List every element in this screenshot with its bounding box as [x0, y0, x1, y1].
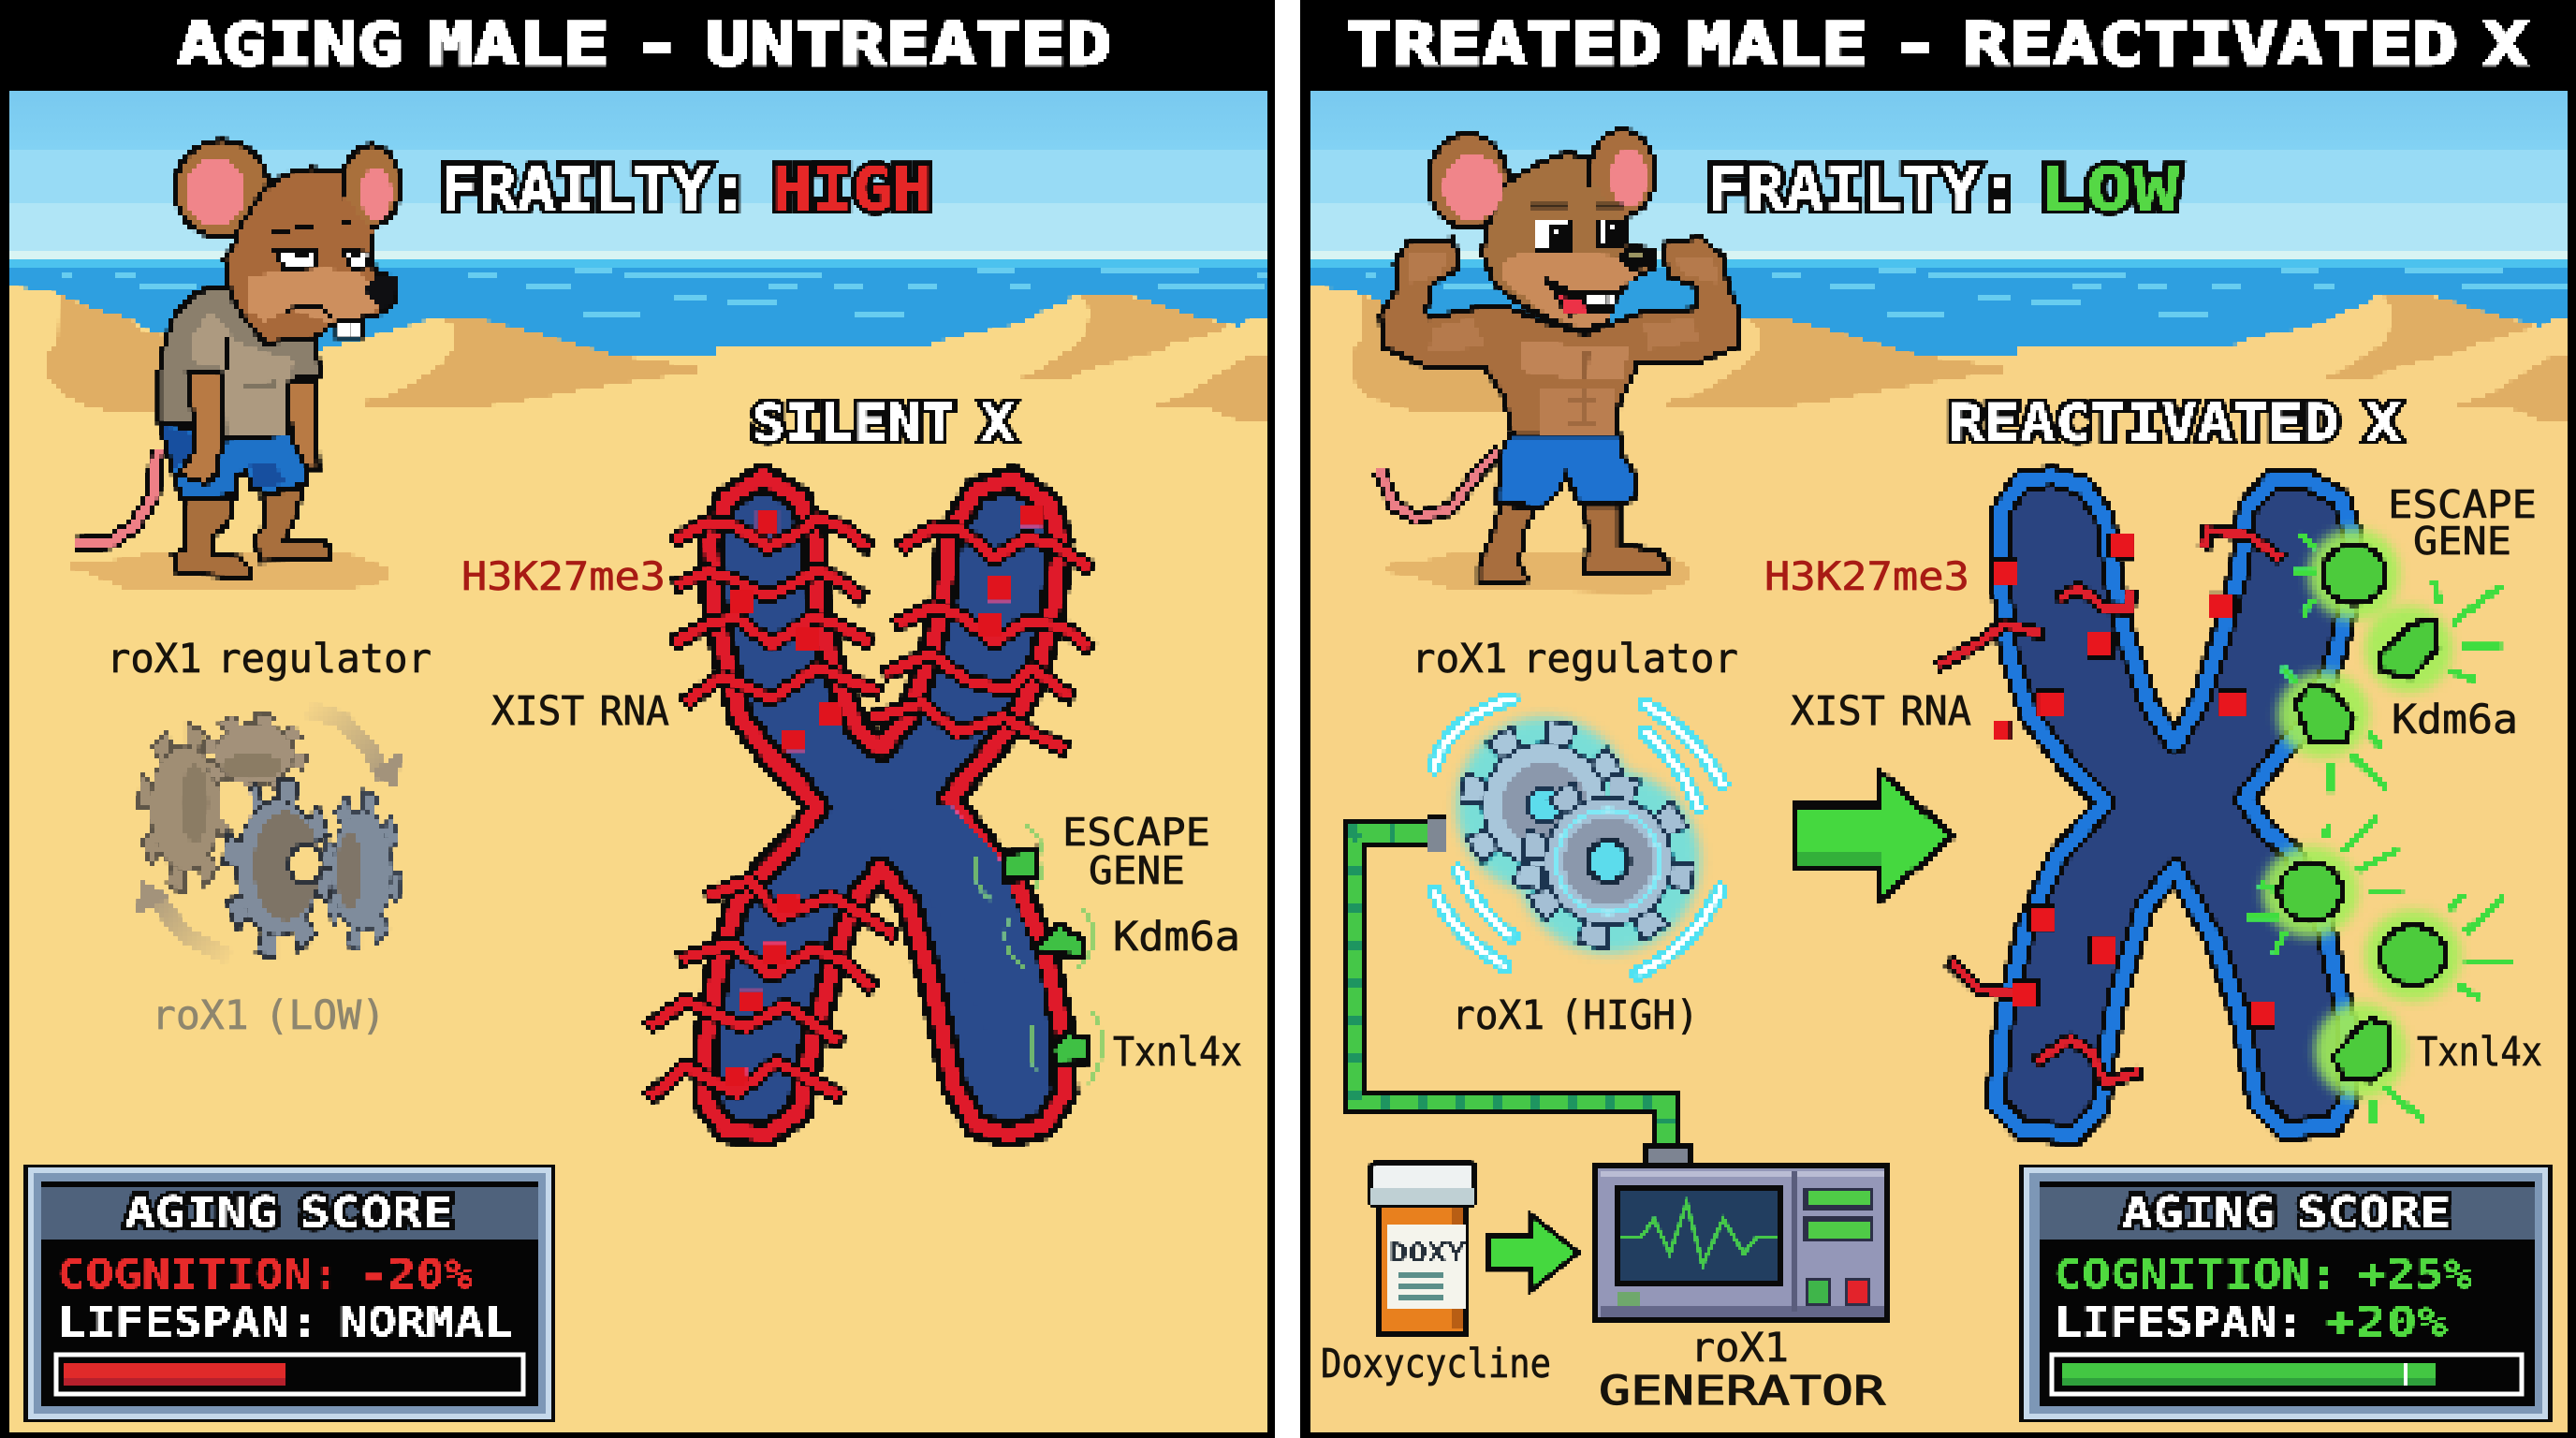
panel: aging score treated: [2019, 1165, 2553, 1422]
icon: muscular mouse: [1379, 130, 1738, 593]
label: Txnl4x right: Txnl4x: [2417, 1029, 2542, 1076]
gene glows: [2262, 529, 2461, 1098]
faint escape gene glows: [975, 824, 1103, 1082]
H3K27me3 marks: [726, 506, 1042, 1086]
title: left panel: AGING MALE - UNTREATED: [177, 10, 1111, 79]
cognition row: COGNITION: +25%: [2054, 1251, 2473, 1299]
arrow: big green: [1792, 766, 1958, 906]
chart: reactivated X chromosome: [1942, 477, 2510, 1135]
label: Txnl4x left: Txnl4x: [1113, 1029, 1242, 1076]
heading: silent X: SILENT X: [752, 393, 1015, 452]
progress bar: [2052, 1355, 2522, 1394]
icon: doxycycline pill bottle: [1370, 1164, 1475, 1334]
icon: glowing gears: [1434, 698, 1722, 974]
faded rotation arrow bottom: [135, 880, 229, 957]
label: roX1 generator: roX1: [1690, 1325, 1789, 1372]
cognition row: COGNITION: -20%: [57, 1251, 474, 1299]
heading: frailty high: [440, 155, 932, 225]
panel: right beach background: [1304, 91, 2576, 1438]
label: escape gene right: ESCAPE: [2388, 482, 2537, 527]
score heading: AGING SCORE: [124, 1187, 453, 1238]
label: roX1 generator: GENERATOR: [1599, 1368, 1885, 1415]
XIST RNA remnants: [1942, 530, 2277, 1082]
label: roX1 regulator left: roX1 regulator: [107, 636, 432, 682]
panel: left beach background: [0, 91, 1278, 1438]
label: escape gene left: ESCAPE: [1062, 810, 1210, 855]
heading: frailty low: FRAILTY:: [1707, 155, 2019, 225]
title: right panel: TREATED MALE - REACTIVATED X: [1347, 10, 2528, 79]
connector: green tube: [1354, 817, 1666, 1150]
chromosome body: [707, 477, 1064, 1135]
lifespan row: LIFESPAN:: [2054, 1299, 2305, 1346]
panel: aging score untreated: [23, 1165, 555, 1422]
gear: rear: [1471, 732, 1617, 878]
heading: frailty high: HIGH: [772, 155, 932, 225]
label: escape gene right: [2388, 482, 2537, 564]
label: XIST RNA right: XIST RNA: [1791, 688, 1971, 735]
arrow: small green: [1488, 1215, 1578, 1290]
icon: broken gears: [135, 710, 402, 957]
escape genes, active: [2279, 545, 2446, 1081]
icon: doxycycline pill bottle: DOXY: [1389, 1237, 1466, 1268]
gear: right blue-grey: [329, 801, 396, 940]
label: roX1 generator: [1599, 1325, 1885, 1415]
label: Kdm6a right: Kdm6a: [2392, 697, 2518, 743]
heading: frailty high: FRAILTY:: [440, 155, 749, 225]
label: escape gene right: GENE: [2413, 519, 2511, 564]
escape gene bumps: [1003, 849, 1088, 1064]
chromosome body: [1996, 477, 2354, 1135]
progress bar: [56, 1355, 523, 1394]
energy arcs: [1434, 698, 1722, 974]
chart: silent X chromosome: [654, 477, 1103, 1135]
label: escape gene left: GENE: [1089, 848, 1185, 893]
H3K27me3 marks: [1991, 534, 2275, 1028]
icon: frail mouse: [68, 140, 400, 590]
gear: top tan: [210, 718, 300, 789]
label: roX1 LOW: roX1 (LOW): [152, 992, 386, 1039]
XIST RNA strands: [654, 518, 1085, 1093]
label: H3K27me3 right: H3K27me3: [1764, 553, 1969, 599]
glow: [1456, 717, 1700, 953]
icon: roX1 generator machine: [1596, 1146, 1888, 1320]
label: roX1 regulator right: roX1 regulator: [1412, 636, 1738, 682]
heading: frailty low: [1707, 155, 2180, 225]
label: XIST RNA left: XIST RNA: [491, 688, 669, 735]
heading: reactivated X: REACTIVATED X: [1949, 393, 2401, 452]
label: Doxycycline: Doxycycline: [1321, 1341, 1551, 1387]
label: Kdm6a left: Kdm6a: [1113, 914, 1240, 961]
lifespan row: LIFESPAN: NORMAL: [57, 1299, 513, 1346]
heading: frailty low: LOW: [2040, 155, 2180, 225]
label: H3K27me3 left: H3K27me3: [461, 553, 666, 599]
gear: front blue-grey: [231, 790, 325, 946]
lifespan row: +20%: [2325, 1299, 2449, 1346]
gene rays: [2251, 536, 2510, 1121]
gear: front: [1533, 786, 1683, 936]
score heading: AGING SCORE: [2122, 1187, 2451, 1238]
label: roX1 HIGH: roX1 (HIGH): [1452, 992, 1699, 1039]
gear: left tan: [145, 736, 226, 880]
label: escape gene left: [1062, 810, 1210, 893]
faded rotation arrow top: [307, 710, 402, 789]
lifespan row: [2054, 1299, 2449, 1346]
